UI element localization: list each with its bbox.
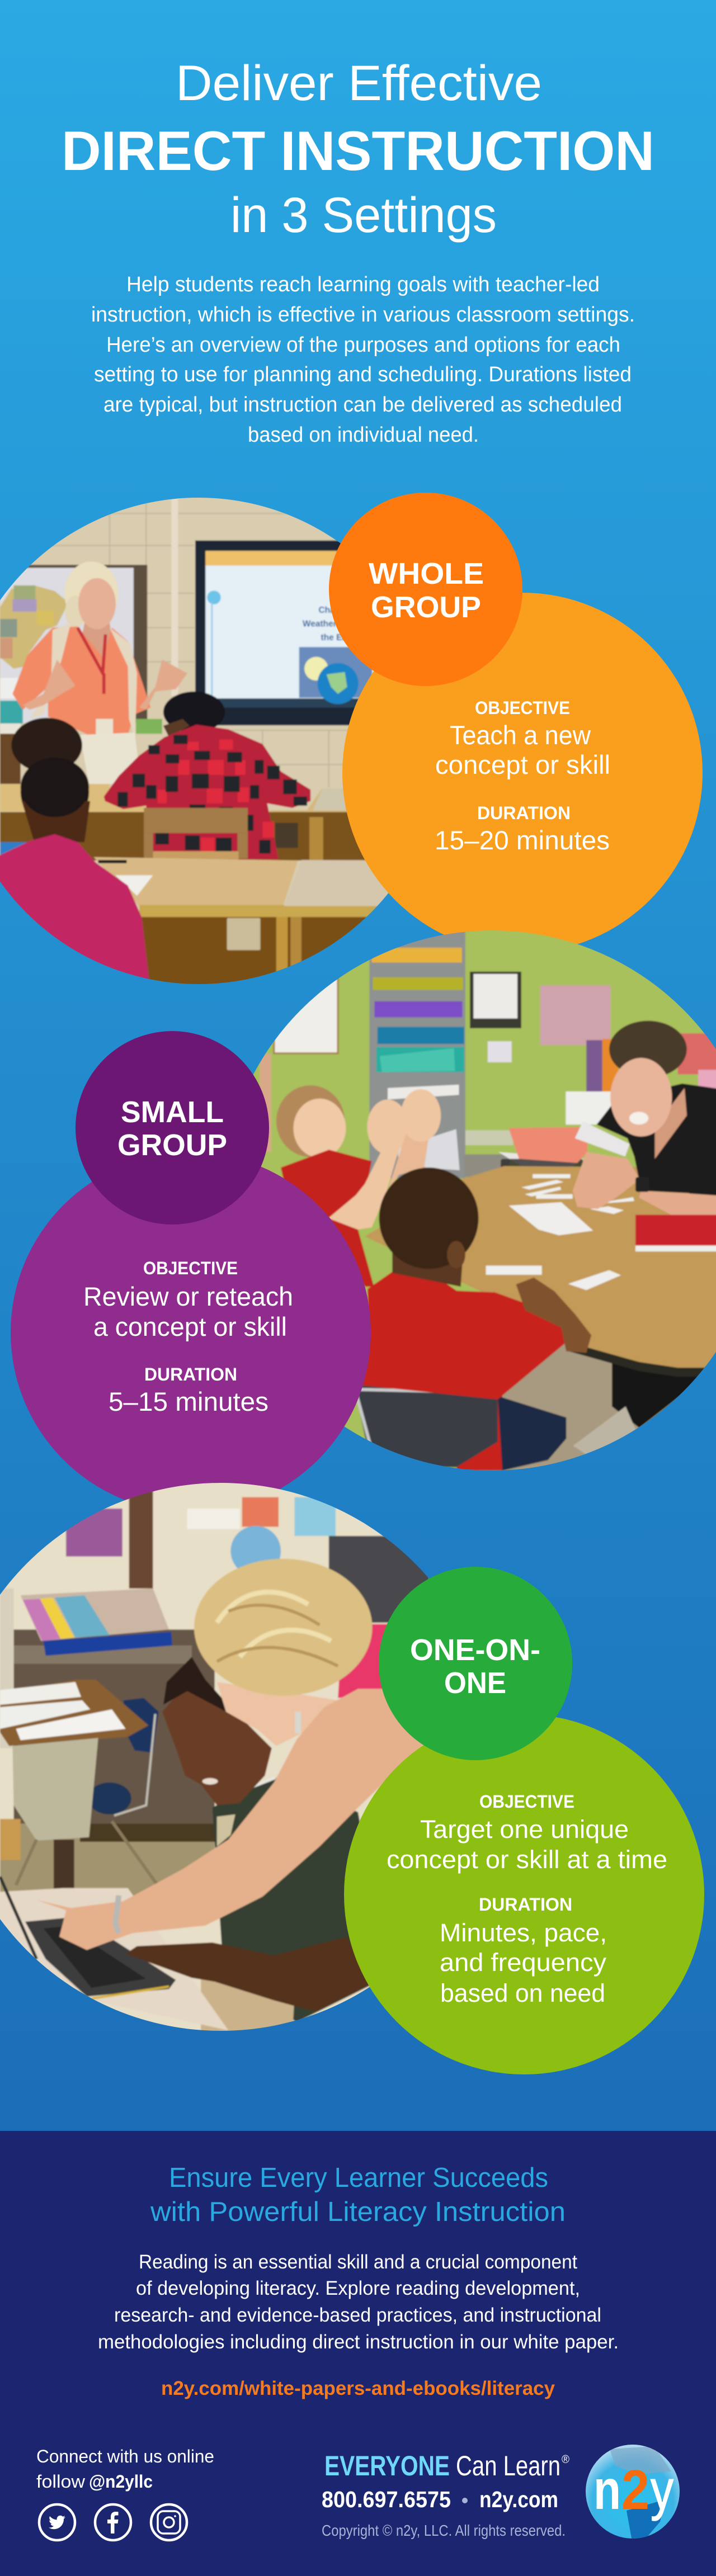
title <box>62 55 654 243</box>
intro paragraph: are typical, but instruction can be delivered as scheduled <box>103 393 622 417</box>
intro paragraph <box>91 273 635 447</box>
logo: n2y globe: y <box>651 2459 673 2521</box>
screen text: Chapter <box>318 606 351 615</box>
wooden chair <box>144 808 248 859</box>
copyright: Copyright © n2y, LLC. All rights reserved. <box>322 2522 566 2539</box>
heading circle: small group: GROUP <box>117 1128 227 1162</box>
contact details: 800.697.6575 <box>322 2487 451 2512</box>
duration label: DURATION <box>479 1894 572 1915</box>
heading circle: one-on-one: ONE-ON- <box>410 1633 540 1667</box>
heading circle: whole group: GROUP <box>371 590 481 624</box>
logo: n2y globe: 2 <box>621 2459 649 2521</box>
duration text: based on need <box>440 1979 605 2007</box>
icon: twitter <box>39 2504 75 2540</box>
objective text: Review or reteach <box>83 1282 293 1311</box>
footer paragraph: Reading is an essential skill and a crucial component <box>139 2251 577 2273</box>
duration text: 15–20 minutes <box>435 825 610 855</box>
desk and laptop <box>0 1877 228 2030</box>
boy from behind <box>354 1168 591 1471</box>
screen text: the Earth <box>321 633 359 642</box>
intro paragraph: instruction, which is effective in various classroom settings. <box>91 303 635 327</box>
screen text <box>302 606 343 641</box>
panel: one-on-one details circle <box>344 1714 704 2074</box>
footer paragraph <box>98 2251 619 2353</box>
panel: footer <box>0 2131 716 2576</box>
objective label: OBJECTIVE <box>479 1792 574 1812</box>
books in tray <box>21 1589 172 1656</box>
footer paragraph: methodologies including direct instruction in our white paper. <box>98 2331 619 2353</box>
front desks <box>93 855 378 984</box>
floor and teacher legs <box>474 1343 698 1471</box>
heading circle: whole group <box>329 493 522 686</box>
social text: follow <box>36 2471 86 2492</box>
duration text: Minutes, pace, <box>440 1918 607 1947</box>
screen text: Weather <box>303 619 337 628</box>
objective label: OBJECTIVE <box>475 698 570 718</box>
heading circle: whole group: WHOLE <box>369 557 484 590</box>
heading circle: one-on-one: ONE <box>444 1666 506 1700</box>
footer heading <box>150 2163 566 2227</box>
teacher laughing <box>573 1021 716 1251</box>
teacher figure <box>12 561 187 784</box>
heading circle: small group: SMALL <box>121 1095 224 1129</box>
objective text: a concept or skill <box>93 1312 287 1341</box>
mid desks <box>0 784 388 861</box>
icon: instagram <box>151 2504 187 2540</box>
footer paragraph: research- and evidence-based practices, and instructional <box>114 2304 601 2326</box>
duration label: DURATION <box>477 803 571 823</box>
contact details <box>322 2487 558 2512</box>
duration text: and frequency <box>440 1948 607 1977</box>
panel: whole group details circle <box>342 593 703 953</box>
intro paragraph: Here’s an overview of the purposes and options for each <box>106 333 620 357</box>
student in plaid jacket <box>104 692 310 859</box>
logo: n2y globe <box>586 2445 680 2541</box>
tagline: EVERYONE <box>324 2450 450 2482</box>
panel: small group details circle <box>11 1152 371 1512</box>
objective label: OBJECTIVE <box>143 1258 238 1278</box>
heading circle: one-on-one <box>379 1567 572 1760</box>
footer heading: with Powerful Literacy Instruction <box>150 2197 566 2227</box>
social text <box>36 2446 214 2492</box>
icon: facebook <box>95 2504 131 2540</box>
objective text <box>435 720 610 779</box>
student in pink shirt <box>0 718 90 856</box>
tagline: ® <box>562 2454 569 2466</box>
title: DIRECT INSTRUCTION <box>62 120 654 182</box>
objective text <box>83 1282 293 1341</box>
girl with raised hands <box>276 1085 441 1287</box>
photo: small group at table <box>253 930 716 1471</box>
white paper link: n2y.com/white-papers-and-ebooks/literacy <box>161 2378 555 2399</box>
intro paragraph: based on individual need. <box>248 423 479 447</box>
objective text: Target one unique <box>420 1815 629 1844</box>
footer heading: Ensure Every Learner Succeeds <box>169 2163 548 2193</box>
objective text: Teach a new <box>450 720 591 750</box>
teacher <box>36 1559 425 1950</box>
student torso and face <box>162 1657 388 2036</box>
tagline: Can Learn <box>456 2450 560 2482</box>
side desk and chair <box>0 1680 159 1892</box>
social text: Connect with us online <box>36 2446 214 2466</box>
duration text: 5–15 minutes <box>109 1387 268 1416</box>
footer paragraph: of developing literacy. Explore reading development, <box>136 2277 580 2299</box>
student arm <box>126 1937 370 2012</box>
intro paragraph: setting to use for planning and scheduling. Durations listed <box>94 363 632 386</box>
objective text <box>387 1815 667 1874</box>
duration label: DURATION <box>144 1364 237 1384</box>
title: Deliver Effective <box>176 55 542 111</box>
contact details: n2y.com <box>479 2487 558 2512</box>
intro paragraph: Help students reach learning goals with teacher-led <box>126 273 600 296</box>
photo: teacher presenting to whole class <box>0 498 388 984</box>
objective text: concept or skill at a time <box>387 1845 667 1874</box>
duration text <box>440 1918 607 2007</box>
heading circle: small group <box>76 1031 269 1225</box>
social text: @n2yllc <box>89 2471 153 2492</box>
title: in 3 Settings <box>230 187 497 243</box>
table <box>365 1166 716 1377</box>
tagline <box>324 2450 569 2482</box>
table cards <box>486 1174 634 1290</box>
objective text: concept or skill <box>435 750 610 779</box>
logo: n2y globe: n <box>593 2459 621 2521</box>
photo: teacher helping one student at a laptop <box>0 1483 429 2031</box>
